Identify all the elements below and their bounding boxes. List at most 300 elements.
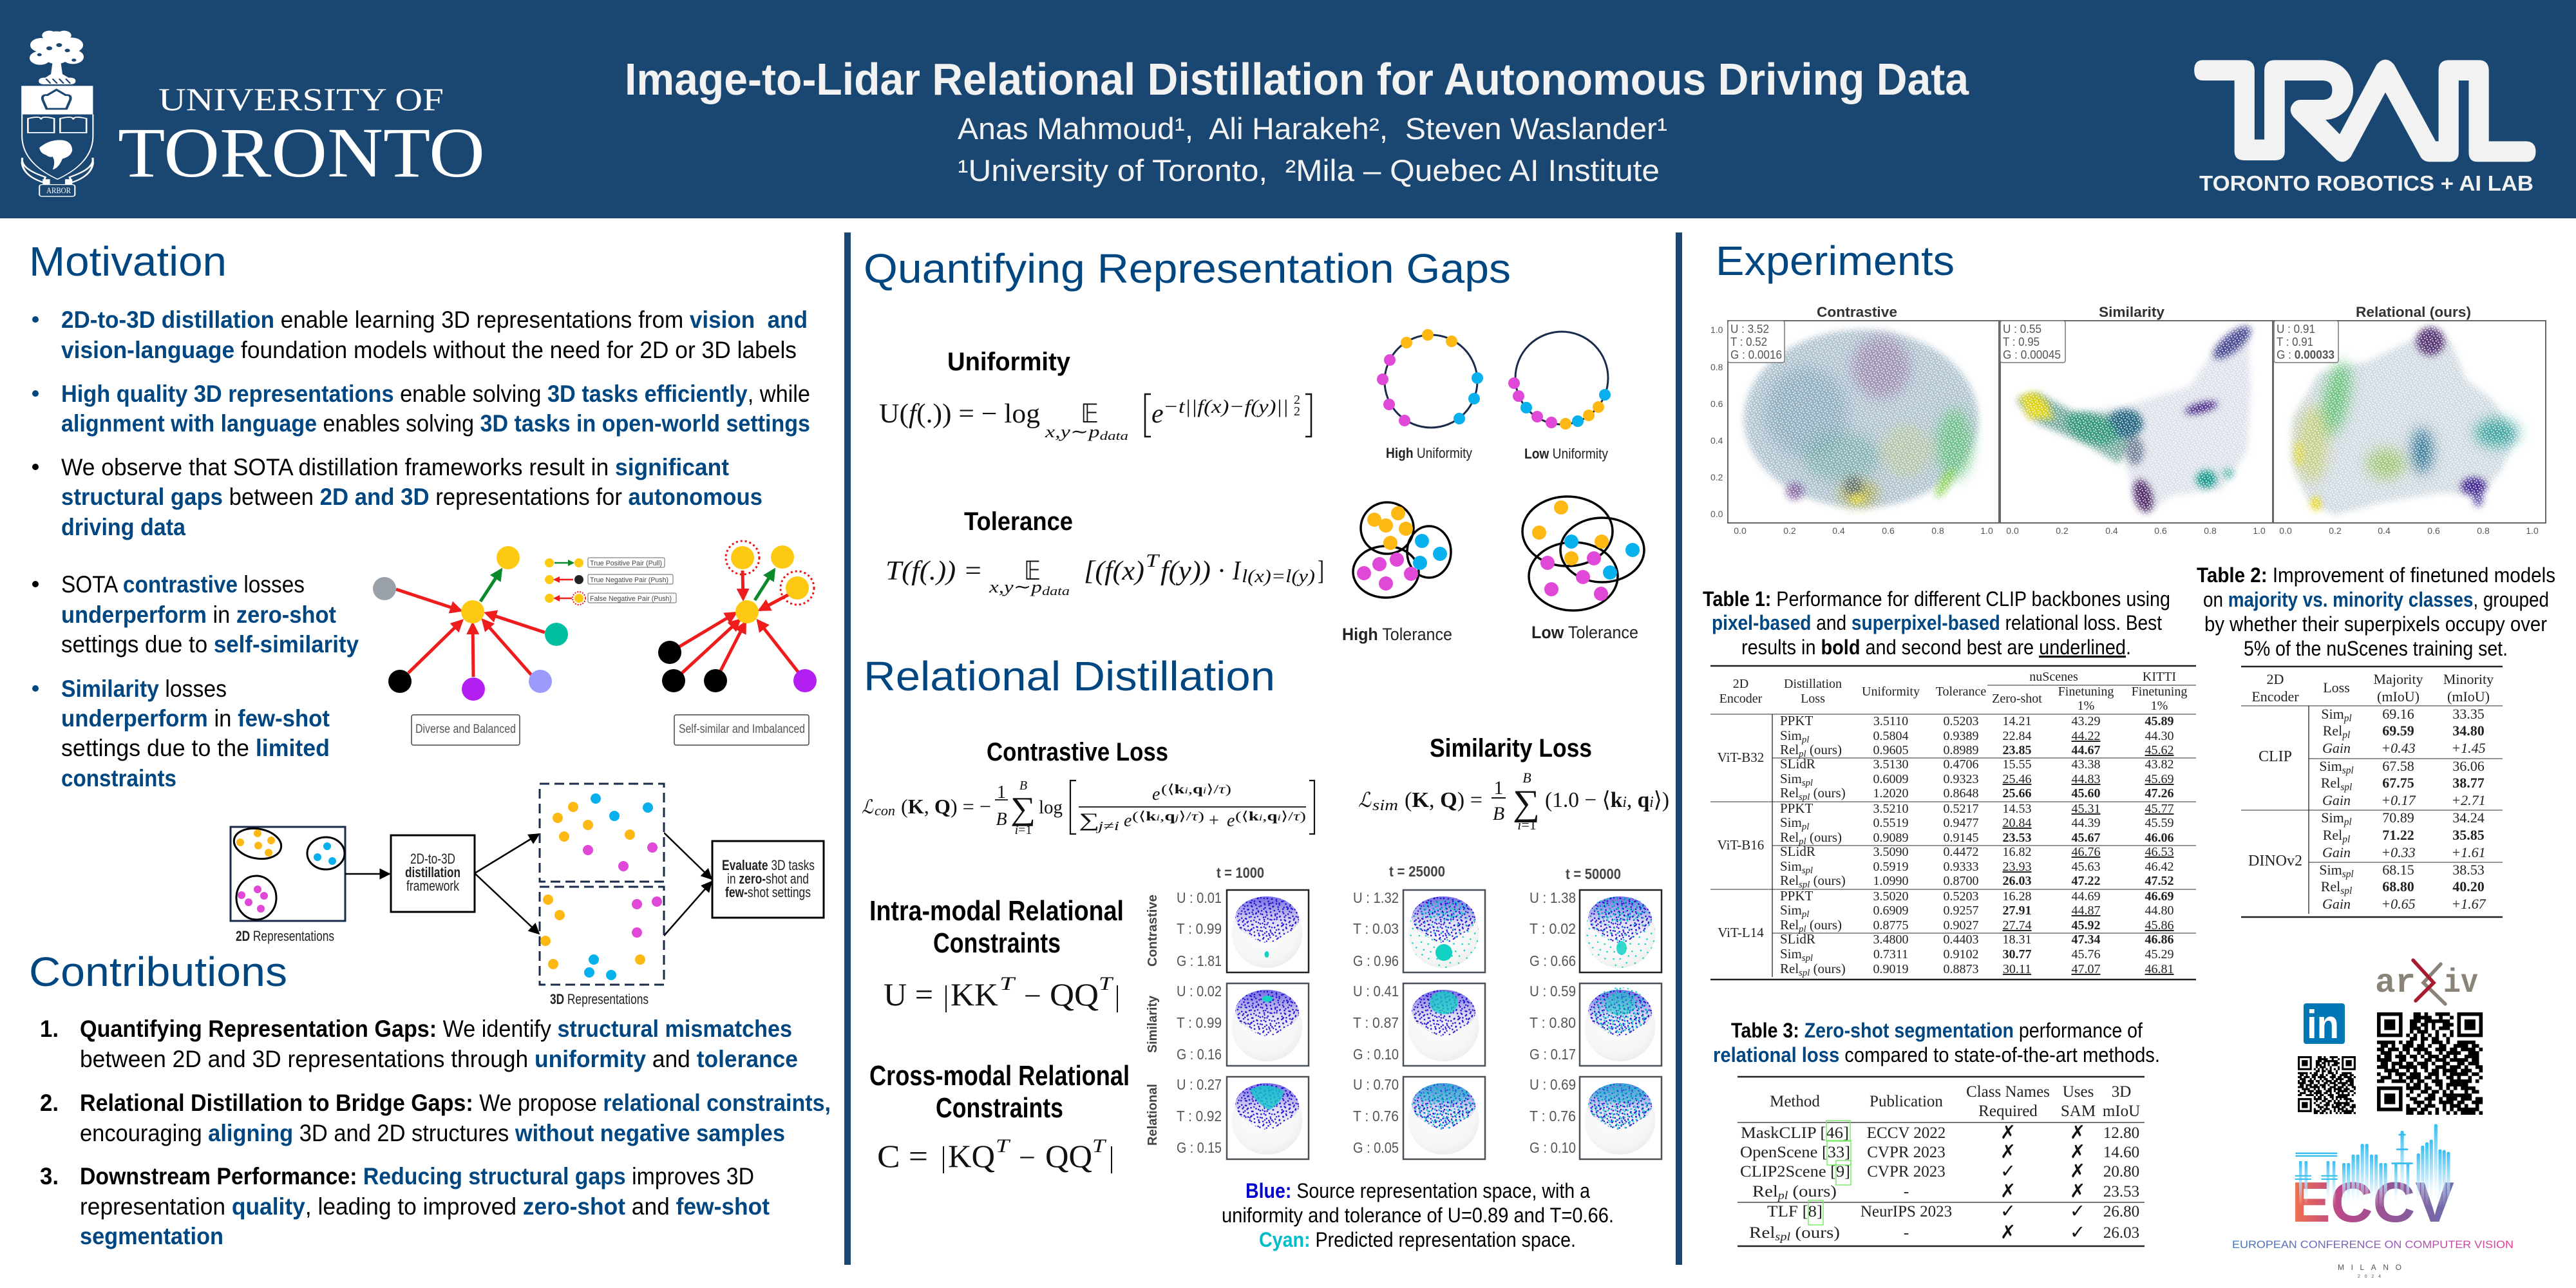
table 2 rows: 40.20 bbox=[2452, 878, 2485, 895]
caption: sphere legend: uniformity and tolerance of U=0.89 and T=0.66. bbox=[1222, 1204, 1614, 1227]
row: relational: G : 0.10 bbox=[1530, 1139, 1576, 1156]
formula: contrastive loss: e bbox=[1124, 811, 1132, 831]
table 1 values: 18.31 bbox=[2003, 933, 2031, 947]
text: bullet 5: settings due to the limited bbox=[61, 735, 330, 761]
table 2 rows: 68.80 bbox=[2382, 878, 2414, 895]
encoder labels bbox=[2248, 748, 2302, 869]
row: similarity: U : 0.02 bbox=[1177, 983, 1222, 999]
row headers: Contrastive bbox=[1146, 895, 1160, 967]
info box: relational metrics bbox=[2274, 321, 2338, 363]
item 3: segmentation bbox=[80, 1223, 223, 1249]
scatter: contrastive bbox=[1728, 321, 1999, 523]
formula: cross-modal bbox=[877, 1135, 1112, 1174]
table 1 values: 47.22 bbox=[2071, 874, 2101, 888]
item 2 bbox=[40, 1090, 831, 1146]
framework box: distillation bbox=[405, 864, 460, 880]
icon: Milan skyline bars bbox=[2295, 1124, 2450, 1208]
check and cross marks: ✗ bbox=[2070, 1122, 2085, 1143]
info box: contrastive metrics bbox=[1728, 321, 1785, 363]
2D representations box bbox=[231, 825, 345, 944]
axis labels: 0.4 bbox=[1710, 435, 1723, 446]
axis labels: 0.6 bbox=[2427, 526, 2440, 536]
table 2 rows: +2.71 bbox=[2451, 792, 2486, 808]
text: bullet 5: underperform in few-shot bbox=[61, 705, 330, 732]
heading: Experiments: Experiments bbox=[1716, 238, 1955, 284]
panel: relational distillation bbox=[862, 653, 1669, 1251]
lab name: TORONTO ROBOTICS + AI LAB bbox=[2199, 171, 2533, 195]
loss names: SLidR bbox=[1780, 756, 1815, 772]
ECCV logo bbox=[2232, 1124, 2514, 1279]
table 2 header: Minority bbox=[2443, 671, 2494, 687]
formula: uniformity: 2 bbox=[1294, 393, 1300, 407]
text: bullet 5: constraints bbox=[61, 765, 176, 791]
loss names: Rel bbox=[1780, 961, 1799, 976]
check and cross marks: ✗ bbox=[2000, 1142, 2016, 1162]
loss names: spl bbox=[1799, 880, 1810, 890]
table 3 header: Class Names bbox=[1966, 1083, 2050, 1101]
caption: table 2: by whether their superpixels occupy over bbox=[2204, 612, 2547, 636]
axis labels: 0.4 bbox=[2378, 526, 2391, 536]
table 1 values: 0.6909 bbox=[1873, 904, 1909, 918]
formula: tolerance: f(y)) bbox=[1160, 556, 1211, 586]
axis labels: 0.6 bbox=[1882, 526, 1895, 536]
loss names: Rel bbox=[1780, 742, 1799, 757]
table 1 values: 45.60 bbox=[2071, 786, 2101, 800]
method names: Rel bbox=[1749, 1224, 1772, 1242]
table 2 rows: +0.65 bbox=[2381, 896, 2416, 912]
table 2 rows: Gain bbox=[2322, 792, 2351, 808]
loss names: spl bbox=[1799, 792, 1810, 802]
2D representations box: 2D Representations bbox=[236, 928, 334, 944]
formula: contrastive loss: ∑ bbox=[1010, 790, 1036, 826]
table 1 values: 26.03 bbox=[2003, 874, 2031, 888]
loss names: spl bbox=[1802, 778, 1813, 788]
formula: contrastive loss: log bbox=[1039, 797, 1063, 818]
item 1: between 2D and 3D representations through uniformity and tolerance bbox=[80, 1046, 798, 1072]
axis labels: 0.8 bbox=[1710, 362, 1723, 372]
caption: sphere legend: Cyan: Predicted representation space. bbox=[1259, 1228, 1576, 1251]
axis labels: 1.0 bbox=[2526, 526, 2539, 536]
formula: uniformity: 𝔼 bbox=[1081, 399, 1099, 429]
loss names: Rel bbox=[1780, 785, 1799, 800]
table 1 header: Finetuning bbox=[2132, 685, 2187, 699]
publication and scores: - bbox=[1904, 1224, 1909, 1242]
table 2 rows: +0.43 bbox=[2381, 740, 2416, 756]
formula: intra-modal: QQ bbox=[1050, 976, 1099, 1012]
table 2 rows: 34.80 bbox=[2452, 723, 2485, 739]
publication and scores: 26.80 bbox=[2103, 1203, 2139, 1220]
table 1 header: Distillation bbox=[1784, 677, 1842, 691]
table 1 values: 46.06 bbox=[2145, 831, 2174, 845]
table 1 values bbox=[1873, 714, 2174, 976]
axis labels: 0.8 bbox=[2477, 526, 2490, 536]
table 1 values: 0.9145 bbox=[1944, 831, 1978, 845]
table 1 values: 44.83 bbox=[2071, 772, 2101, 786]
table 1 values: 14.21 bbox=[2003, 714, 2031, 728]
text: bullet 4: SOTA contrastive losses bbox=[61, 571, 305, 598]
formula: similarity loss: ℒ bbox=[1358, 788, 1372, 811]
table 1 values: 45.31 bbox=[2071, 802, 2101, 816]
diagram: low tolerance: Low Tolerance bbox=[1531, 623, 1638, 642]
wordmark: University of: UNIVERSITY OF bbox=[158, 81, 444, 117]
axis labels: 0.2 bbox=[2329, 526, 2342, 536]
diagram: low tolerance bbox=[1522, 497, 1644, 642]
table 1 values: 23.85 bbox=[2003, 743, 2031, 757]
loss names: Sim bbox=[1780, 902, 1802, 918]
item 2: 2. bbox=[40, 1090, 59, 1116]
panel: motivation bbox=[29, 238, 824, 1007]
caption: table 1: Table 1: Performance for different CLIP backbones using bbox=[1703, 587, 2170, 611]
row: relational: U : 0.27 bbox=[1177, 1076, 1222, 1093]
encoder labels: ViT-L14 bbox=[1718, 925, 1764, 940]
publication and scores: - bbox=[1904, 1183, 1909, 1200]
table 2 rows: spl bbox=[2340, 886, 2352, 896]
loss names: (ours) bbox=[1806, 917, 1842, 933]
table 2 rows: 71.22 bbox=[2382, 827, 2414, 843]
icon: LinkedIn: in bbox=[2307, 1003, 2339, 1047]
heading: Relational Distillation: Relational Distillation bbox=[864, 653, 1275, 699]
table 1 values: 46.69 bbox=[2145, 889, 2174, 904]
formula: tolerance: l(x)=l(y) bbox=[1242, 567, 1315, 587]
loss names: SLidR bbox=[1780, 931, 1815, 947]
axis labels: 0.2 bbox=[1783, 526, 1796, 536]
table 1 values: 0.9102 bbox=[1944, 947, 1978, 961]
info box: similarity metrics: U : 0.55 bbox=[2003, 323, 2041, 336]
text: bullet 1 bbox=[61, 307, 808, 363]
table 1 values: 45.67 bbox=[2071, 831, 2101, 845]
table 1 values: 0.9333 bbox=[1944, 860, 1978, 874]
arrows to 3D spaces bbox=[475, 833, 712, 936]
row: contrastive: G : 1.81 bbox=[1177, 952, 1222, 969]
info box: similarity metrics: G : 0.00045 bbox=[2003, 348, 2061, 361]
row: relational: T : 0.76 bbox=[1530, 1108, 1576, 1124]
formula: tolerance: T(f(.)) = bbox=[886, 556, 983, 586]
plot titles: Similarity bbox=[2099, 304, 2165, 320]
table 1 values: 3.5130 bbox=[1873, 757, 1909, 772]
table 1 header: Encoder bbox=[1719, 692, 1763, 706]
formula: uniformity: e bbox=[1151, 399, 1164, 429]
table 2 rows: Rel bbox=[2323, 723, 2350, 741]
table 1 values: 27.74 bbox=[2003, 918, 2031, 933]
publication and scores: 12.80 bbox=[2103, 1124, 2139, 1142]
caption: table 1 bbox=[1703, 587, 2170, 659]
info box: contrastive metrics: G : 0.0016 bbox=[1730, 348, 1782, 361]
table 2 rows: 34.24 bbox=[2452, 810, 2485, 826]
table 1 values: 0.9389 bbox=[1944, 729, 1978, 743]
formula: cross-modal: − bbox=[1019, 1142, 1036, 1173]
table 1 values: 0.9605 bbox=[1873, 743, 1909, 757]
table 2 rows: +0.17 bbox=[2381, 792, 2416, 808]
flow diagram: 2D to 3D distillation bbox=[231, 784, 824, 1007]
item 2: Relational Distillation to Bridge Gaps: We propose relational constraints, bbox=[80, 1090, 831, 1116]
publication and scores: CVPR 2023 bbox=[1867, 1163, 1946, 1180]
table 1 values: 44.87 bbox=[2071, 904, 2101, 918]
formula: cross-modal: T bbox=[1092, 1135, 1107, 1157]
table 1 values: 45.63 bbox=[2071, 860, 2101, 874]
table 2 rows: spl bbox=[2342, 765, 2354, 776]
table 2 rows: Sim bbox=[2319, 862, 2354, 880]
info box: contrastive metrics: T : 0.52 bbox=[1730, 336, 1767, 348]
axis labels: 0.2 bbox=[1710, 472, 1723, 482]
QR code: LinkedIn bbox=[2298, 1057, 2356, 1113]
table 1 values: 45.89 bbox=[2145, 714, 2174, 728]
framework box bbox=[391, 835, 475, 912]
table 1 values: 0.9019 bbox=[1873, 962, 1909, 976]
table 1 values: 46.42 bbox=[2145, 860, 2174, 874]
panel: quantifying representation gaps bbox=[864, 245, 1644, 644]
bullet markers bbox=[32, 316, 39, 692]
table 1 header: 2D bbox=[1733, 677, 1748, 691]
chart: balanced graph bbox=[373, 546, 568, 745]
loss names: PPKT bbox=[1780, 888, 1814, 904]
text: Milano: MILANO bbox=[2338, 1263, 2401, 1272]
row: similarity: T : 0.87 bbox=[1353, 1014, 1399, 1031]
table 1 values: 0.5804 bbox=[1873, 729, 1909, 743]
axis labels: 0.6 bbox=[2154, 526, 2167, 536]
table 3 header: Method bbox=[1770, 1093, 1820, 1110]
loss names: Rel bbox=[1780, 873, 1799, 888]
row: similarity: U : 0.59 bbox=[1530, 983, 1576, 999]
table 1 values: 45.62 bbox=[2145, 743, 2174, 757]
diagram: high tolerance: High Tolerance bbox=[1342, 625, 1452, 644]
loss names: pl bbox=[1798, 837, 1806, 847]
check and cross marks bbox=[2000, 1122, 2085, 1243]
text: bullet 4: settings due to self-similarity bbox=[61, 631, 359, 658]
table 2 rows: Gain bbox=[2322, 896, 2351, 912]
publication and scores: NeurIPS 2023 bbox=[1861, 1203, 1952, 1220]
formula: similarity loss bbox=[1358, 770, 1669, 833]
loss names: (ours) bbox=[1810, 961, 1846, 976]
formula: tolerance: x,y∼p bbox=[989, 578, 1030, 596]
table 2 rows: Rel bbox=[2323, 827, 2350, 845]
loss names: Rel bbox=[1780, 829, 1799, 845]
text: bullet 5 bbox=[61, 676, 330, 791]
table 2 header: (mIoU) bbox=[2447, 688, 2490, 705]
framework box: 2D-to-3D bbox=[410, 851, 455, 867]
formula: contrastive loss: ∑ bbox=[1079, 810, 1099, 831]
axis labels: 0.0 bbox=[1710, 509, 1723, 519]
caption: sphere legend bbox=[1222, 1179, 1614, 1251]
panel: contributions bbox=[29, 949, 831, 1249]
table 1 values: 45.77 bbox=[2145, 802, 2174, 816]
encoder labels: CLIP bbox=[2259, 748, 2292, 765]
table 1 values: 0.9323 bbox=[1944, 772, 1978, 786]
info box: relational metrics: U : 0.91 bbox=[2277, 323, 2315, 336]
table 2 rows: Gain bbox=[2322, 740, 2351, 756]
table 1 values: 0.8873 bbox=[1944, 962, 1978, 976]
formula: contrastive loss: i=1 bbox=[1015, 823, 1032, 837]
heading: Quantifying Representation Gaps: Quantifying Representation Gaps bbox=[864, 245, 1511, 292]
evaluate box: in zero-shot and bbox=[727, 871, 809, 887]
formula: uniformity: −t||f(x)−f(y)|| bbox=[1163, 396, 1289, 417]
table 1 values: 25.46 bbox=[2003, 772, 2031, 786]
table 1 header: 1% bbox=[2151, 699, 2168, 713]
formula: similarity loss: (K, Q) = bbox=[1405, 788, 1482, 812]
method names: OpenScene [33] bbox=[1740, 1144, 1850, 1161]
caption: sphere legend: Blue: Source representation space, with a bbox=[1245, 1179, 1590, 1202]
table 1 values: 44.30 bbox=[2145, 729, 2174, 743]
text: bullet 3: We observe that SOTA distillation frameworks result in significant bbox=[61, 454, 729, 480]
panel: experiments bbox=[1703, 238, 2555, 1279]
method names: CLIP2Scene [9] bbox=[1740, 1163, 1850, 1180]
row: contrastive: G : 0.96 bbox=[1353, 952, 1399, 969]
table 2 rows: pl bbox=[2342, 834, 2350, 845]
table 1 values: 3.5110 bbox=[1873, 714, 1908, 728]
loss names: PPKT bbox=[1780, 713, 1814, 728]
legend: pair types: False Negative Pair (Push) bbox=[590, 595, 672, 603]
diagram: high uniformity bbox=[1377, 329, 1483, 461]
formula: contrastive loss: con bbox=[875, 802, 895, 819]
check and cross marks: ✗ bbox=[2070, 1142, 2085, 1162]
item 1: Quantifying Representation Gaps: We identify structural mismatches bbox=[80, 1016, 792, 1042]
table 1 values: 0.9257 bbox=[1944, 904, 1978, 918]
heading: Motivation: Motivation bbox=[29, 238, 227, 285]
table 2 rows: 69.59 bbox=[2382, 723, 2414, 739]
axis labels: 0.8 bbox=[1931, 526, 1944, 536]
formula: tolerance: 𝔼 bbox=[1024, 556, 1041, 586]
table 1 values: 27.91 bbox=[2003, 904, 2031, 918]
table 2 rows: 36.06 bbox=[2452, 758, 2485, 774]
table 2 rows bbox=[2319, 706, 2486, 912]
formula: contrastive loss: + bbox=[1209, 811, 1219, 831]
formula: contrastive loss: e bbox=[1152, 784, 1160, 804]
table 2 header: 2D bbox=[2267, 671, 2284, 687]
row: relational: U : 0.69 bbox=[1530, 1076, 1576, 1093]
table 2 rows: Sim bbox=[2319, 758, 2354, 776]
formula: cross-modal: KQ bbox=[948, 1138, 995, 1174]
table 1 values: 0.5519 bbox=[1873, 816, 1909, 830]
table 3 header: mIoU bbox=[2103, 1103, 2140, 1120]
table 1 values: 45.69 bbox=[2145, 772, 2174, 786]
table 3 header bbox=[1770, 1083, 2140, 1120]
encoder labels: ViT-B32 bbox=[1718, 750, 1764, 765]
table 1 values: 0.5217 bbox=[1944, 802, 1978, 816]
table 1 values: 45.76 bbox=[2071, 947, 2101, 961]
caption: table 2: 5% of the nuScenes training set. bbox=[2244, 637, 2508, 660]
column headers: t = 25000 bbox=[1389, 863, 1445, 880]
axis labels: 0.6 bbox=[1710, 399, 1723, 409]
axis labels: 0.2 bbox=[2056, 526, 2069, 536]
formula: uniformity: x,y∼p bbox=[1045, 422, 1086, 441]
table 1 values: 20.84 bbox=[2003, 816, 2031, 830]
formula: similarity loss: 1 bbox=[1494, 777, 1503, 799]
table 1 values: 0.5203 bbox=[1944, 889, 1978, 904]
table 2 header: (mIoU) bbox=[2377, 688, 2420, 705]
table 1 values: 43.82 bbox=[2145, 757, 2174, 772]
TRAIL lab logo bbox=[2194, 59, 2535, 195]
text: bullet 3: driving data bbox=[61, 514, 185, 540]
table 2 rows: 33.35 bbox=[2452, 706, 2485, 722]
formula: intra-modal: T bbox=[1099, 973, 1114, 994]
loss names: pl bbox=[1798, 924, 1806, 934]
3D representation: bottom: 3D Representations bbox=[550, 991, 649, 1007]
table 1 values: 45.92 bbox=[2071, 918, 2101, 933]
table 1 values: 44.69 bbox=[2071, 889, 2101, 904]
formula: uniformity bbox=[879, 393, 1311, 443]
diagram: low uniformity: Low Uniformity bbox=[1524, 446, 1608, 462]
formula: tolerance: ] bbox=[1318, 556, 1324, 586]
formula: similarity loss: sim bbox=[1372, 797, 1398, 814]
table 1 values: 1.2020 bbox=[1873, 786, 1909, 800]
table 2 rows: pl bbox=[2344, 713, 2352, 724]
table 1 values: 47.26 bbox=[2145, 786, 2174, 800]
text: bullet 2: High quality 3D representations enable solving 3D tasks efficiently, while bbox=[61, 381, 810, 407]
table 1 values: 16.28 bbox=[2003, 889, 2031, 904]
plot titles: Relational (ours) bbox=[2356, 304, 2471, 320]
publication and scores: 14.60 bbox=[2103, 1144, 2139, 1161]
row: relational: T : 0.76 bbox=[1353, 1108, 1399, 1124]
table 3 header: Publication bbox=[1870, 1093, 1943, 1110]
formula: intra-modal: KK bbox=[951, 976, 998, 1012]
info box: similarity metrics bbox=[2000, 321, 2065, 363]
header banner bbox=[0, 0, 2576, 218]
caption: table 2: Table 2: Improvement of finetuned models bbox=[2197, 564, 2555, 587]
subheading: contrastive loss: Contrastive Loss bbox=[987, 738, 1168, 766]
table 2 rows: pl bbox=[2342, 730, 2350, 741]
formula: similarity loss: (1.0 − ⟨ki, qi⟩) bbox=[1545, 788, 1669, 812]
item 3 bbox=[40, 1163, 770, 1249]
method names bbox=[1740, 1124, 1850, 1243]
table 1 values: 3.4800 bbox=[1873, 933, 1909, 947]
caption: table 1: pixel-based and superpixel-based relational loss. Best bbox=[1712, 611, 2162, 634]
subheading: intra-modal constraints bbox=[869, 895, 1124, 959]
column headers bbox=[1217, 863, 1621, 882]
formula: cross-modal: C = bbox=[877, 1138, 928, 1174]
formula: uniformity: 2 bbox=[1294, 404, 1300, 419]
text: bullet 1: 2D-to-3D distillation enable learning 3D representations from vision and bbox=[61, 307, 808, 333]
check and cross marks: ✗ bbox=[2000, 1222, 2016, 1243]
publication and scores: 23.53 bbox=[2103, 1183, 2139, 1200]
table 1 values: 43.29 bbox=[2071, 714, 2101, 728]
table 1 values: 22.84 bbox=[2003, 729, 2031, 743]
column headers: t = 1000 bbox=[1217, 864, 1264, 881]
loss names: Sim bbox=[1780, 858, 1802, 874]
legend: pair types: True Negative Pair (Push) bbox=[590, 576, 668, 584]
subheading: similarity loss: Similarity Loss bbox=[1430, 734, 1592, 762]
table 1 values: 45.29 bbox=[2145, 947, 2174, 961]
publication and scores: 26.03 bbox=[2103, 1224, 2139, 1242]
loss names: Rel bbox=[1780, 917, 1799, 933]
formula: similarity loss: ∑ bbox=[1513, 783, 1540, 823]
legend: pair types: True Positive Pair (Pull) bbox=[590, 560, 662, 567]
item 3: representation quality, leading to improved zero-shot and few-shot bbox=[80, 1193, 770, 1220]
wordmark: ECCV: ECCV bbox=[2291, 1170, 2454, 1234]
check and cross marks: ✓ bbox=[2000, 1201, 2016, 1222]
publication and scores bbox=[1861, 1124, 2139, 1242]
info box: relational metrics: G : 0.00033 bbox=[2277, 348, 2334, 361]
scatter: similarity bbox=[2000, 321, 2273, 523]
axis labels: 1.0 bbox=[1980, 526, 1993, 536]
row: contrastive: T : 0.03 bbox=[1353, 920, 1399, 937]
table 1 values: 0.4472 bbox=[1944, 845, 1978, 859]
table 3 bbox=[1738, 1077, 2145, 1246]
arrow bbox=[345, 873, 390, 875]
formula: contrastive loss: j≠i bbox=[1095, 819, 1119, 833]
loss names: (ours) bbox=[1810, 785, 1846, 800]
formula: contrastive loss: 1 bbox=[997, 782, 1006, 802]
chart: UMAP scatter plots bbox=[1710, 304, 2546, 536]
caption: table 1: results in bold and second best are underlined. bbox=[1741, 636, 2131, 659]
table 1 values: 0.8989 bbox=[1944, 743, 1978, 757]
table 2 rows: 67.58 bbox=[2382, 758, 2414, 774]
text: 2024: 2024 bbox=[2358, 1274, 2381, 1279]
loss names: (ours) bbox=[1810, 873, 1846, 888]
formula: intra-modal bbox=[884, 973, 1117, 1012]
formula: contrastive loss: (⟨ k i,q i⟩/ τ) bbox=[1235, 810, 1306, 824]
table 1 values: 23.93 bbox=[2003, 860, 2031, 874]
row: contrastive: U : 1.38 bbox=[1530, 889, 1576, 906]
loss names: spl bbox=[1799, 968, 1810, 978]
